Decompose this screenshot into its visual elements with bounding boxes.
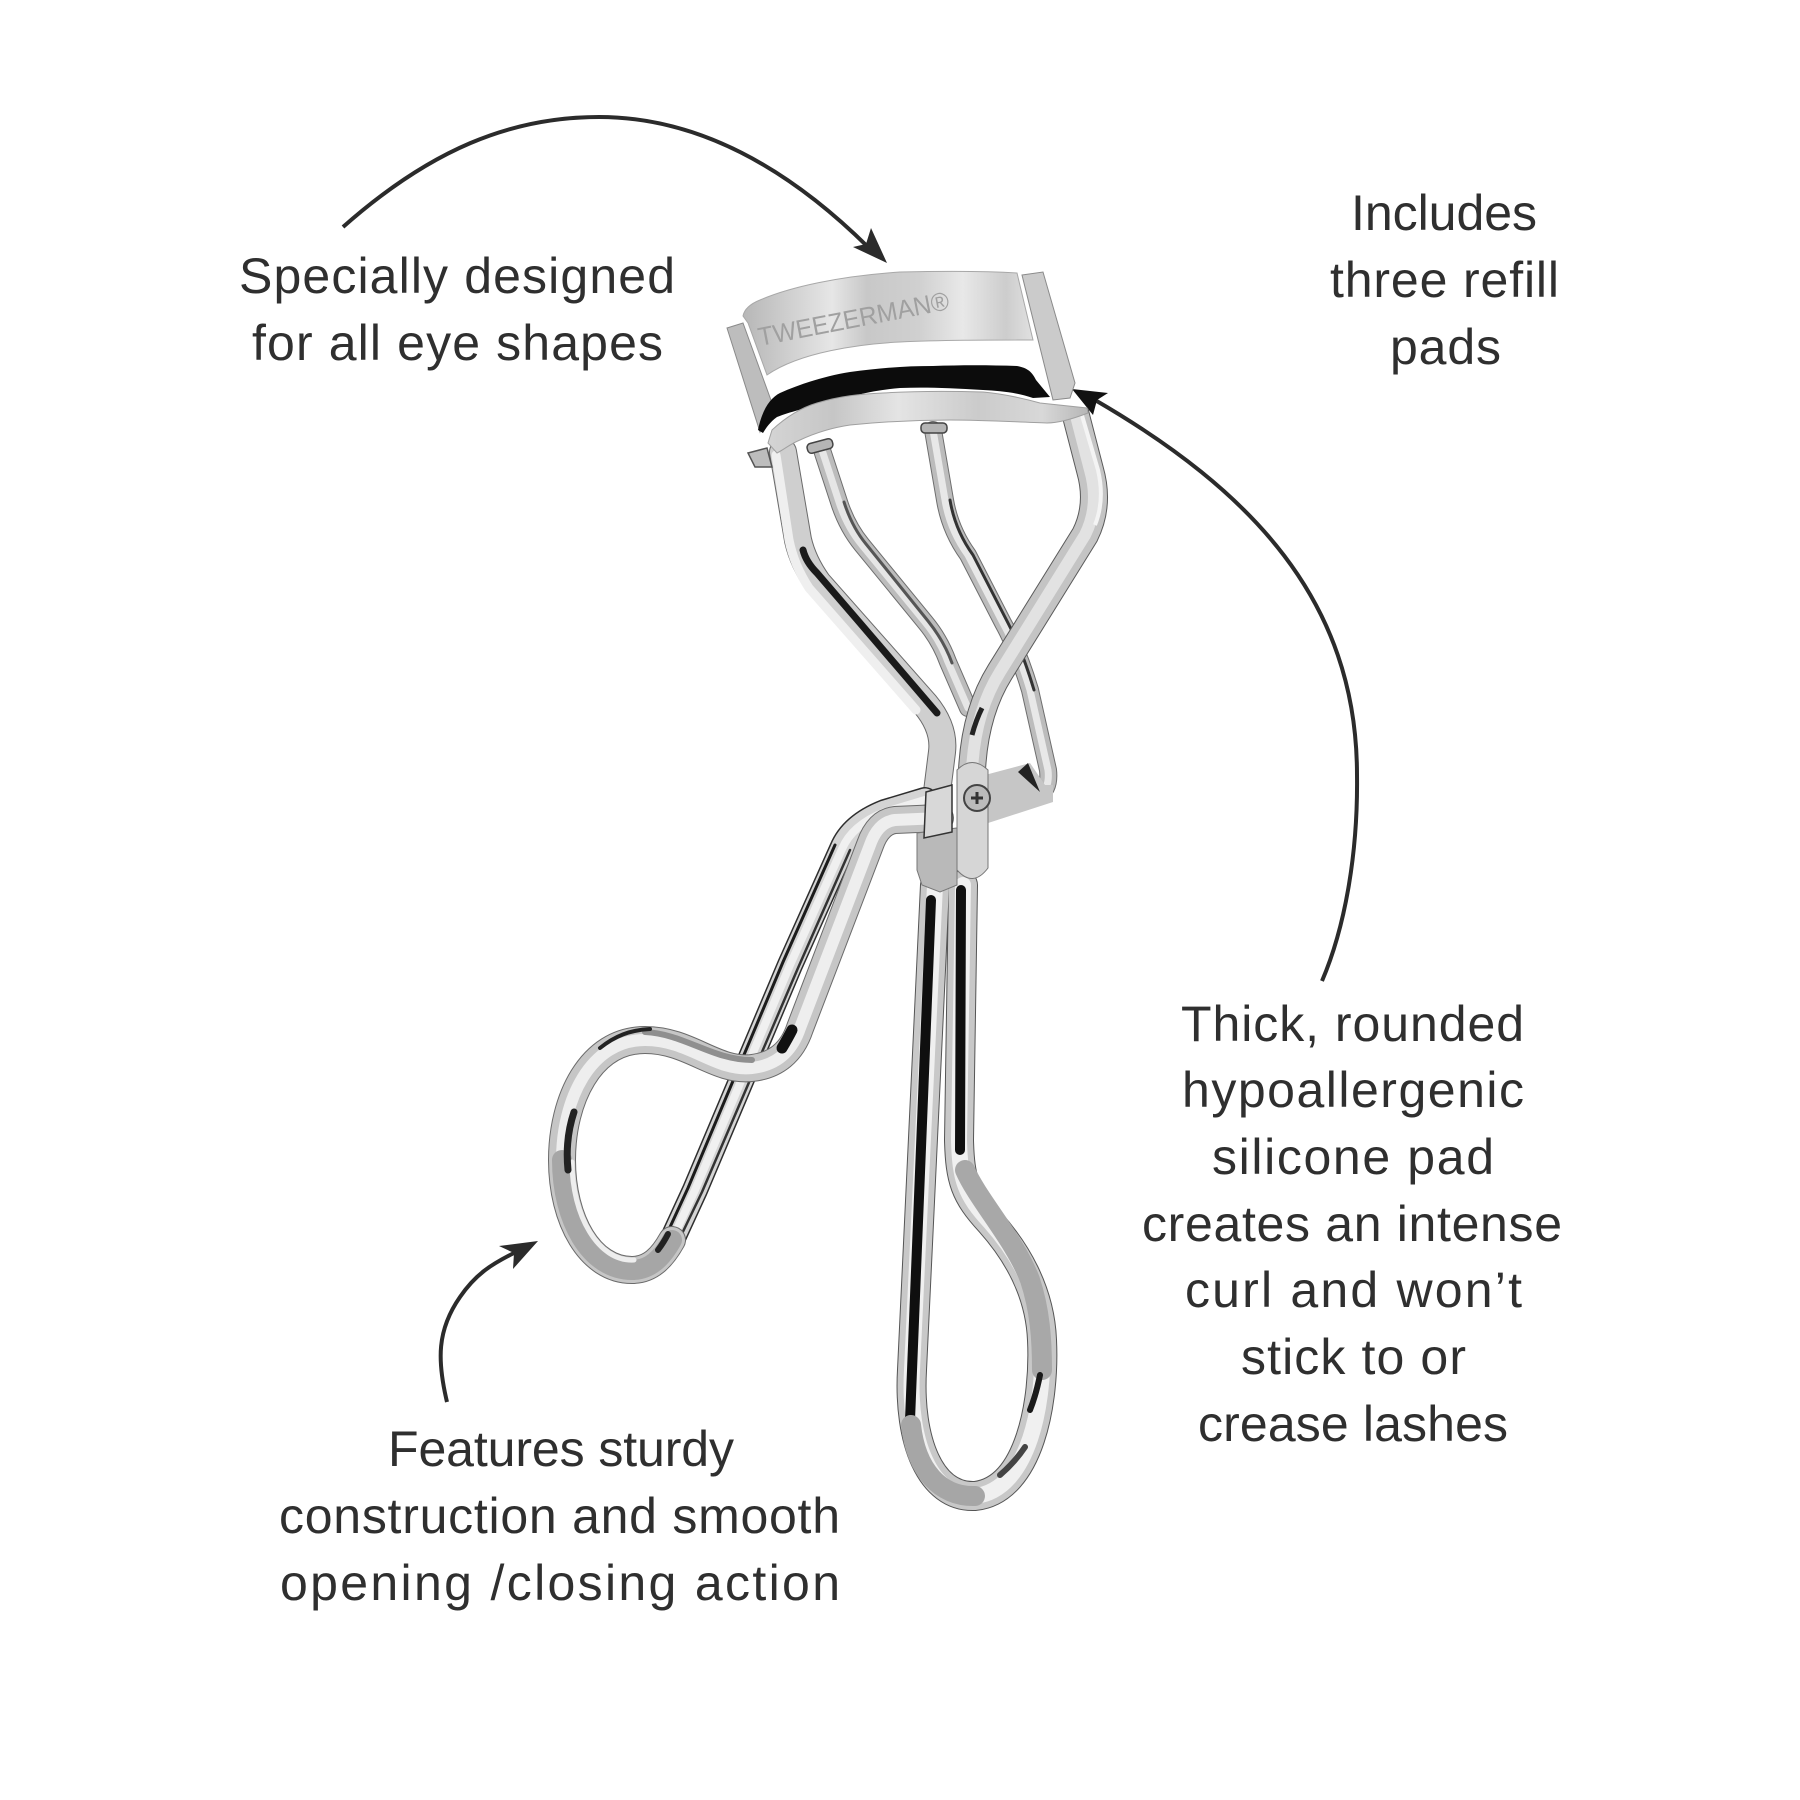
text: silicone pad description: curl and won’t bbox=[1185, 1262, 1522, 1318]
text: specially designed bbox=[239, 248, 675, 371]
text: specially designed: for all eye shapes bbox=[252, 315, 663, 371]
lower bar bbox=[768, 391, 1088, 453]
text: silicone pad description: silicone pad bbox=[1212, 1129, 1494, 1185]
text: sturdy construction: construction and smooth bbox=[279, 1488, 840, 1544]
text: sturdy construction bbox=[279, 1421, 840, 1611]
right arm bbox=[972, 412, 1101, 860]
right post bbox=[1022, 272, 1075, 400]
text: sturdy construction: Features sturdy bbox=[388, 1421, 734, 1477]
text: silicone pad description bbox=[1142, 996, 1562, 1452]
top bar bbox=[743, 271, 1033, 375]
plate shadow bbox=[1018, 763, 1040, 792]
text: silicone pad description: hypoallergenic bbox=[1182, 1062, 1524, 1118]
silicone pad bbox=[758, 365, 1050, 433]
pivot screw bbox=[964, 785, 990, 811]
eyelash curler bbox=[562, 271, 1101, 1496]
text: silicone pad description: stick to or bbox=[1241, 1329, 1466, 1385]
wire stud right bbox=[921, 423, 947, 433]
inner spring wire left bbox=[822, 450, 968, 708]
text: specially designed: Specially designed bbox=[239, 248, 675, 304]
handle joint block bbox=[924, 785, 952, 838]
back handle strand bbox=[665, 800, 925, 1242]
left tab bbox=[748, 448, 772, 467]
arrow: to handle loop bbox=[441, 1241, 538, 1402]
text: includes refill pads: Includes bbox=[1351, 185, 1537, 241]
brand emboss: TWEEZERMAN® bbox=[755, 285, 952, 352]
arrow: to silicone pad bbox=[1072, 389, 1357, 981]
front pivot plate bbox=[957, 762, 988, 879]
text: includes refill pads bbox=[1330, 185, 1559, 375]
text: sturdy construction: opening /closing action bbox=[280, 1555, 840, 1611]
text: includes refill pads: three refill bbox=[1330, 252, 1559, 308]
pivot plate bbox=[985, 763, 1053, 824]
left arm bbox=[776, 452, 942, 800]
front handle with finger loop bbox=[562, 818, 940, 1270]
inner spring wire right bbox=[933, 430, 1048, 794]
lower pivot block bbox=[917, 828, 957, 892]
arrow: to top bar bbox=[343, 117, 887, 263]
text: silicone pad description: crease lashes bbox=[1198, 1396, 1508, 1452]
text: includes refill pads: pads bbox=[1390, 319, 1501, 375]
text: silicone pad description: Thick, rounded bbox=[1181, 996, 1524, 1052]
long handle with finger loop bbox=[910, 885, 1042, 1496]
wire stud left bbox=[806, 438, 834, 454]
text: silicone pad description: creates an intense bbox=[1142, 1196, 1562, 1252]
left post bbox=[727, 323, 772, 432]
